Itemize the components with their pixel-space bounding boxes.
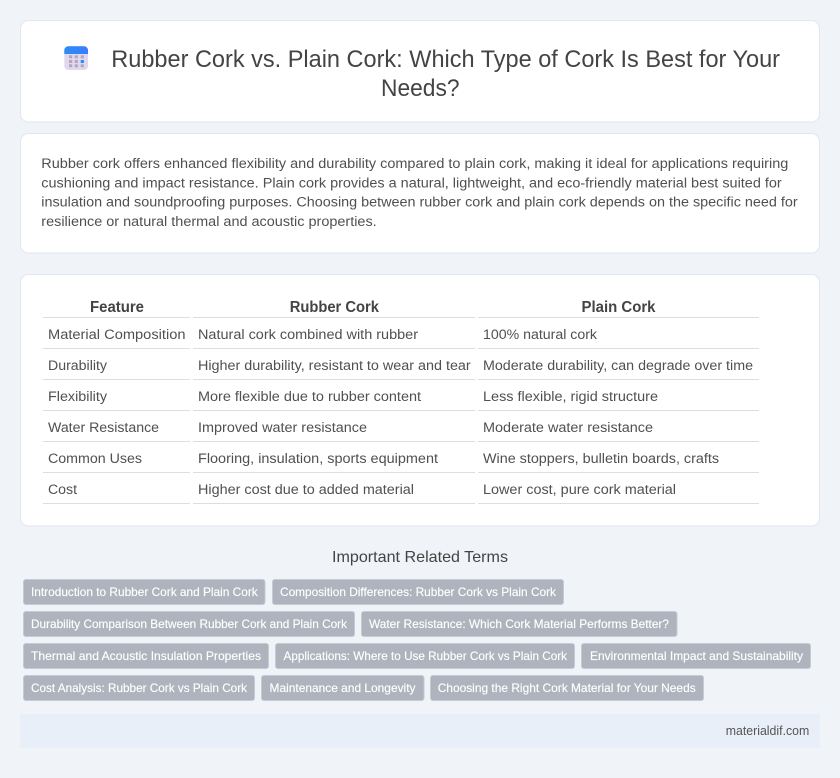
panel: summary paragraph — [20, 134, 820, 253]
tag: Cost Analysis: Rubber Cork vs Plain Cork — [31, 681, 248, 695]
tag: Maintenance and Longevity — [270, 681, 416, 695]
tag — [24, 644, 268, 668]
text block: summary — [41, 156, 798, 230]
text block: summary: Rubber cork offers enhanced flexibility and durability compared to plain cork, making it ideal for applications requiring — [41, 156, 788, 172]
tag: Thermal and Acoustic Insulation Properties — [31, 649, 261, 663]
tag — [276, 644, 574, 668]
table row: flexibility: Flexibility — [48, 389, 108, 405]
tag — [24, 676, 254, 700]
tag: Water Resistance: Which Cork Material Performs Better? — [369, 617, 669, 631]
heading: important related terms: Important Related Terms — [332, 549, 508, 566]
table row: water resistance — [48, 420, 653, 436]
table header: Feature — [90, 299, 144, 316]
icon: calendar — [64, 46, 88, 70]
table row: water resistance: Moderate water resistance — [483, 420, 653, 436]
table row: flexibility — [48, 389, 658, 405]
table row: common uses — [48, 451, 719, 467]
table rules — [43, 317, 759, 504]
table row: material composition: Natural cork combined with rubber — [198, 327, 418, 343]
table row: material composition — [48, 327, 598, 343]
table row: durability — [48, 358, 753, 374]
table row: durability: Higher durability, resistant to wear and tear — [198, 358, 471, 374]
table header — [90, 299, 656, 316]
tag: Applications: Where to Use Rubber Cork vs Plain Cork — [284, 649, 568, 663]
table row: material composition: 100% natural cork — [483, 327, 598, 343]
related term tags — [24, 580, 810, 700]
table header: Plain Cork — [582, 299, 656, 316]
table row: durability: Moderate durability, can degrade over time — [483, 358, 753, 374]
tag — [24, 612, 354, 636]
title — [111, 46, 780, 102]
tag: Durability Comparison Between Rubber Cork and Plain Cork — [31, 617, 348, 631]
table row: common uses: Flooring, insulation, sports equipment — [198, 451, 438, 467]
tag — [272, 580, 564, 604]
tag: Composition Differences: Rubber Cork vs Plain Cork — [280, 585, 557, 599]
tag — [24, 580, 265, 604]
table row: common uses: Common Uses — [48, 451, 142, 467]
table row: water resistance: Improved water resistance — [198, 420, 367, 436]
title: Rubber Cork vs. Plain Cork: Which Type of Cork Is Best for Your — [111, 46, 780, 73]
table row: flexibility: More flexible due to rubber content — [198, 389, 421, 405]
table row: durability: Durability — [48, 358, 108, 374]
panel: title card — [20, 20, 820, 122]
text block: summary: cushioning and impact resistance. Plain cork provides a natural, lightweight, and eco-friendly material best suited for — [41, 175, 782, 191]
text block: summary: insulation and soundproofing purposes. Choosing between rubber cork and plain cork depends on the specific need for — [41, 195, 798, 211]
table row: cost: Higher cost due to added material — [198, 482, 414, 498]
tag: Choosing the Right Cork Material for Your Needs — [438, 681, 696, 695]
tag — [582, 644, 810, 668]
table row: flexibility: Less flexible, rigid structure — [483, 389, 658, 405]
text block: summary: resilience or natural thermal and acoustic properties. — [41, 214, 377, 230]
panel: comparison table — [20, 274, 820, 526]
table header: Rubber Cork — [290, 299, 379, 316]
tag: Environmental Impact and Sustainability — [590, 649, 803, 663]
table row: water resistance: Water Resistance — [48, 420, 159, 436]
table row: cost — [48, 482, 676, 498]
table row: material composition: Material Composition — [48, 327, 186, 343]
footer: materialdif.com — [726, 724, 809, 738]
table row: common uses: Wine stoppers, bulletin boards, crafts — [483, 451, 719, 467]
tag — [362, 612, 677, 636]
tag — [262, 676, 424, 700]
tag — [430, 676, 704, 700]
title: Needs? — [381, 75, 460, 102]
table row: cost: Cost — [48, 482, 77, 498]
table row: cost: Lower cost, pure cork material — [483, 482, 676, 498]
tag: Introduction to Rubber Cork and Plain Cork — [31, 585, 259, 599]
footer — [20, 714, 820, 748]
